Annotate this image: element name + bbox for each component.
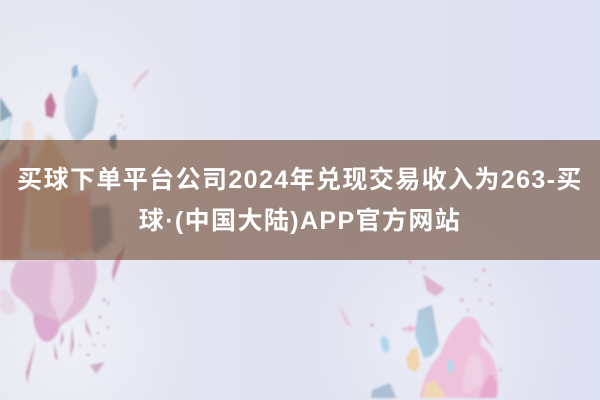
top left gems — [72, 64, 79, 88]
gem: blue bottom — [371, 383, 396, 398]
title — [17, 166, 583, 235]
gem: yellow bottom — [424, 380, 446, 398]
gem: pink shard — [423, 274, 445, 296]
translucent brown title band — [0, 140, 600, 260]
lower left pink splash — [11, 260, 97, 341]
lower right pink splash — [420, 317, 498, 398]
gem: small cyan — [447, 358, 454, 374]
title: 买球下单平台公司2024年兑现交易收入为263-买 — [17, 166, 583, 194]
gem: blue hexagon — [415, 305, 439, 358]
gem: small blue — [379, 335, 391, 353]
gem: yellow — [406, 347, 420, 372]
gems beneath band, left — [0, 133, 113, 260]
title: 球·(中国大陆)APP官方网站 — [139, 207, 461, 235]
